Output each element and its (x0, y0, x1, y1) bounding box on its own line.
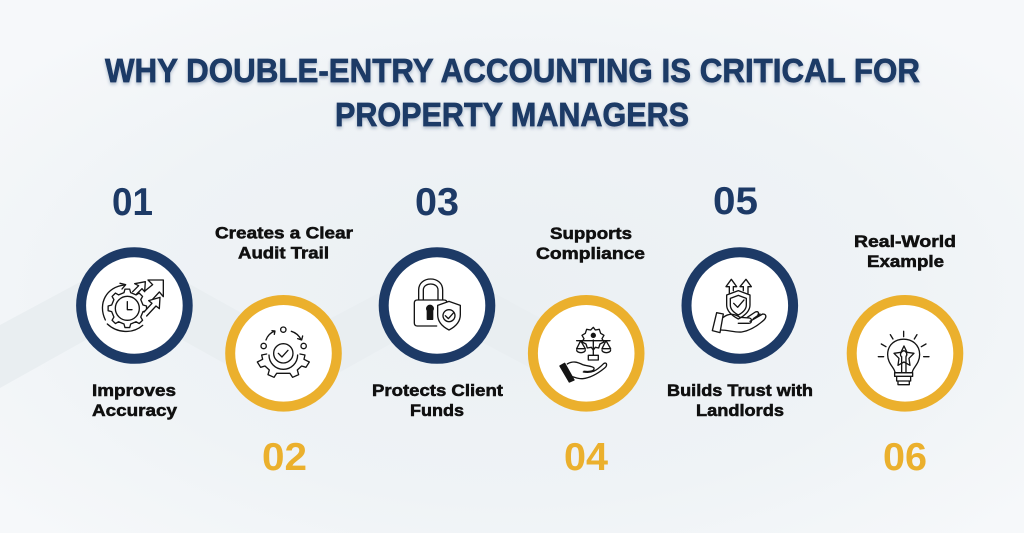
ring 02 (230, 300, 337, 407)
ring 04 (533, 300, 640, 407)
step 05: builds trust with landlords: Landlords (696, 401, 784, 420)
icon: hand holding scales and gear (560, 327, 611, 382)
step 01: improves accuracy: Accuracy (92, 401, 178, 420)
ring 06 (852, 300, 958, 407)
number 06: 06 (883, 436, 927, 479)
step 01: improves accuracy (81, 181, 188, 420)
step 05: builds trust with landlords (667, 180, 813, 420)
step 06: real-world example: Example (867, 252, 944, 271)
label 03: Protects Client (372, 381, 503, 400)
ring 05 (686, 252, 793, 359)
number 03: 03 (415, 181, 459, 224)
icon: clock gear with arrows (102, 280, 163, 331)
label 04: Supports (550, 224, 632, 243)
step 04: supports compliance (533, 224, 645, 479)
title (105, 52, 920, 133)
number 01: 01 (112, 181, 153, 224)
icon: gear with check (257, 327, 309, 377)
ring 01 (81, 252, 188, 359)
number 02: 02 (262, 436, 307, 479)
label 01: Improves (92, 381, 176, 400)
number 05: 05 (713, 180, 758, 223)
label 06: Real-World (854, 232, 956, 251)
title: WHY DOUBLE-ENTRY ACCOUNTING IS CRITICAL FOR (105, 52, 920, 89)
step 03: protects client funds: Funds (410, 401, 464, 420)
step 02: creates a clear audit trail: Audit Trail (238, 244, 329, 262)
icon: hand with shield and arrows (712, 279, 766, 333)
icon: lightbulb with star (878, 331, 929, 385)
label 02: Creates a Clear (215, 224, 353, 242)
number 04: 04 (564, 436, 608, 479)
title: PROPERTY MANAGERS (335, 96, 689, 133)
step 06: real-world example (852, 232, 958, 479)
ring 03 (384, 252, 490, 359)
icon: padlock and shield (414, 279, 460, 330)
label 05: Builds Trust with (667, 381, 813, 400)
step 02: creates a clear audit trail (215, 224, 353, 479)
step 03: protects client funds (372, 181, 503, 420)
step 04: supports compliance: Compliance (536, 244, 645, 263)
